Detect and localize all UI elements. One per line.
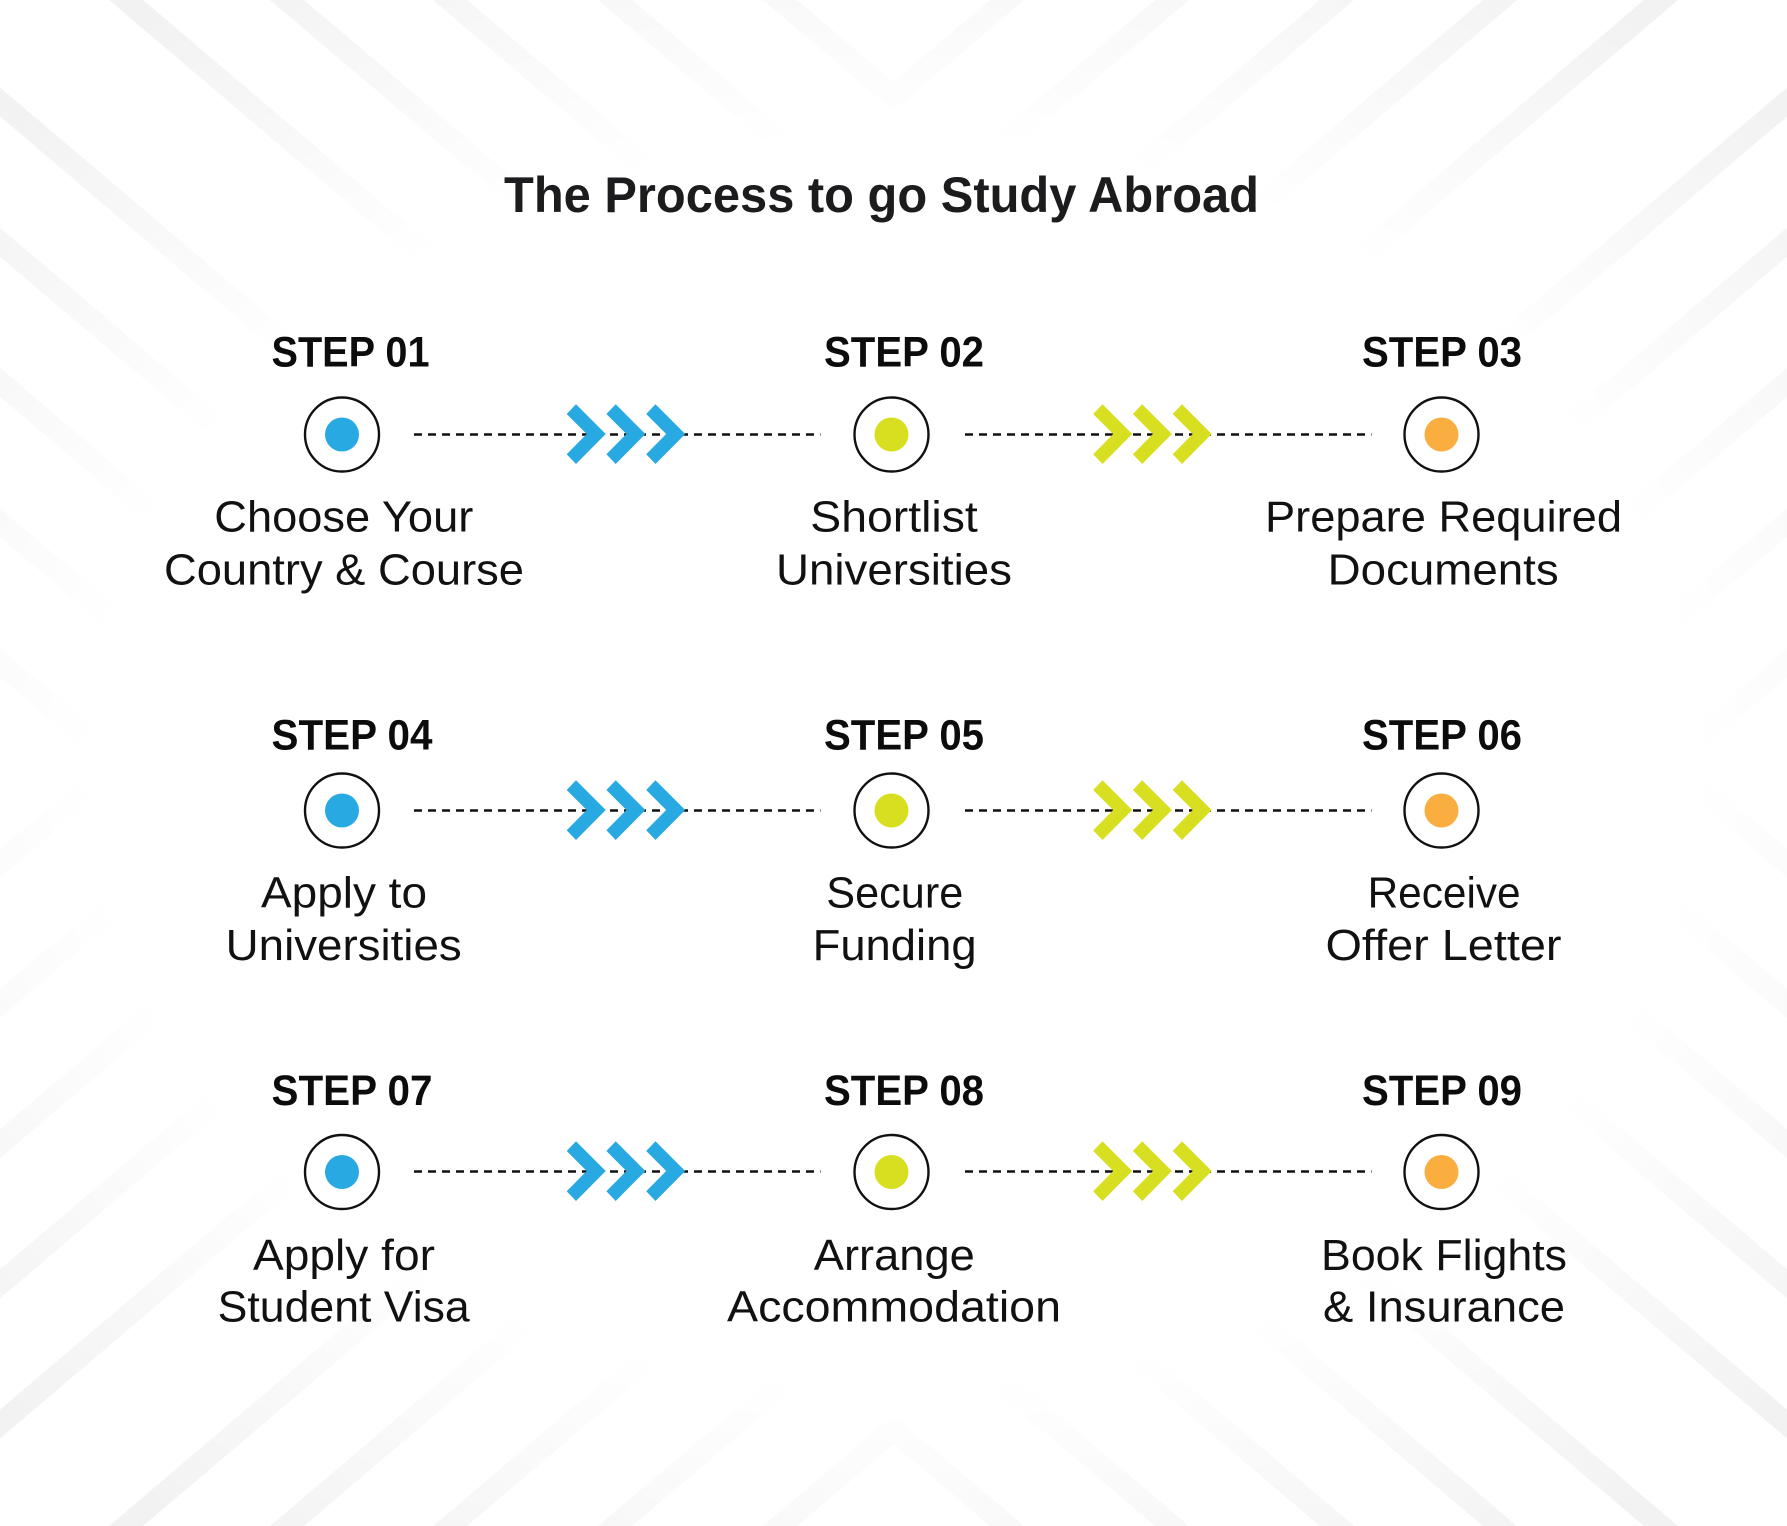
- description: step 02: [776, 492, 1012, 594]
- connector arrow: step 01 to 02: [414, 404, 820, 464]
- heading: step 08: STEP 08: [824, 1067, 984, 1115]
- description: step 09: & Insurance: [1323, 1282, 1565, 1332]
- description: step 05: Secure: [826, 868, 963, 918]
- connector arrow: step 04 to 05: [414, 780, 820, 840]
- panel: step 03: [1265, 328, 1622, 594]
- description: step 08: Arrange: [814, 1231, 975, 1280]
- description: step 01: Country & Course: [164, 546, 524, 594]
- connector arrow: step 07 to 08: [414, 1141, 820, 1201]
- icon: green node: [854, 1135, 928, 1209]
- panel: step 07: [218, 1067, 470, 1332]
- panel: step 02: [776, 328, 1012, 594]
- description: step 07: Apply for: [253, 1231, 435, 1280]
- description: step 06: Offer Letter: [1326, 921, 1562, 970]
- description: step 03: Prepare Required: [1265, 492, 1622, 542]
- description: step 04: [226, 868, 462, 970]
- connector arrow: step 02 to 03: [965, 404, 1372, 464]
- description: step 04: Apply to: [261, 868, 427, 918]
- icon: orange node: [1404, 774, 1478, 848]
- description: step 09: [1321, 1231, 1567, 1332]
- description: step 01: [164, 492, 524, 594]
- heading: step 09: STEP 09: [1362, 1067, 1522, 1115]
- heading: step 04: STEP 04: [272, 712, 433, 760]
- connector arrow: step 08 to 09: [965, 1141, 1372, 1201]
- description: step 01: Choose Your: [214, 492, 473, 542]
- panel: step 05: [813, 712, 984, 970]
- title: The Process to go Study Abroad: [504, 167, 1259, 223]
- icon: blue node: [305, 398, 379, 472]
- description: step 07: [218, 1231, 470, 1332]
- description: step 05: Funding: [813, 921, 977, 970]
- description: step 02: Universities: [776, 546, 1012, 594]
- heading: step 07: STEP 07: [272, 1067, 432, 1115]
- heading: step 03: STEP 03: [1362, 328, 1522, 376]
- icon: orange node: [1404, 398, 1478, 472]
- connector arrow: step 05 to 06: [965, 780, 1372, 840]
- description: step 06: [1326, 868, 1562, 970]
- description: step 03: Documents: [1328, 546, 1559, 594]
- description: step 09: Book Flights: [1321, 1231, 1567, 1280]
- description: step 03: [1265, 492, 1622, 594]
- heading: step 01: STEP 01: [272, 328, 430, 376]
- panel: step 09: [1321, 1067, 1567, 1332]
- description: step 08: Accommodation: [727, 1282, 1061, 1332]
- panel: step 04: [226, 712, 462, 970]
- icon: blue node: [305, 1135, 379, 1209]
- description: step 07: Student Visa: [218, 1282, 470, 1332]
- description: step 05: [813, 868, 977, 970]
- panel: step 01: [164, 328, 524, 594]
- panel: step 08: [727, 1067, 1061, 1332]
- icon: green node: [854, 774, 928, 848]
- description: step 04: Universities: [226, 921, 462, 970]
- heading: step 02: STEP 02: [824, 328, 984, 376]
- icon: orange node: [1404, 1135, 1478, 1209]
- heading: step 06: STEP 06: [1362, 712, 1522, 760]
- icon: green node: [854, 398, 928, 472]
- description: step 02: Shortlist: [810, 492, 978, 542]
- icon: blue node: [305, 774, 379, 848]
- heading: step 05: STEP 05: [824, 712, 984, 760]
- panel: step 06: [1326, 712, 1562, 970]
- description: step 06: Receive: [1368, 868, 1521, 918]
- description: step 08: [727, 1231, 1061, 1332]
